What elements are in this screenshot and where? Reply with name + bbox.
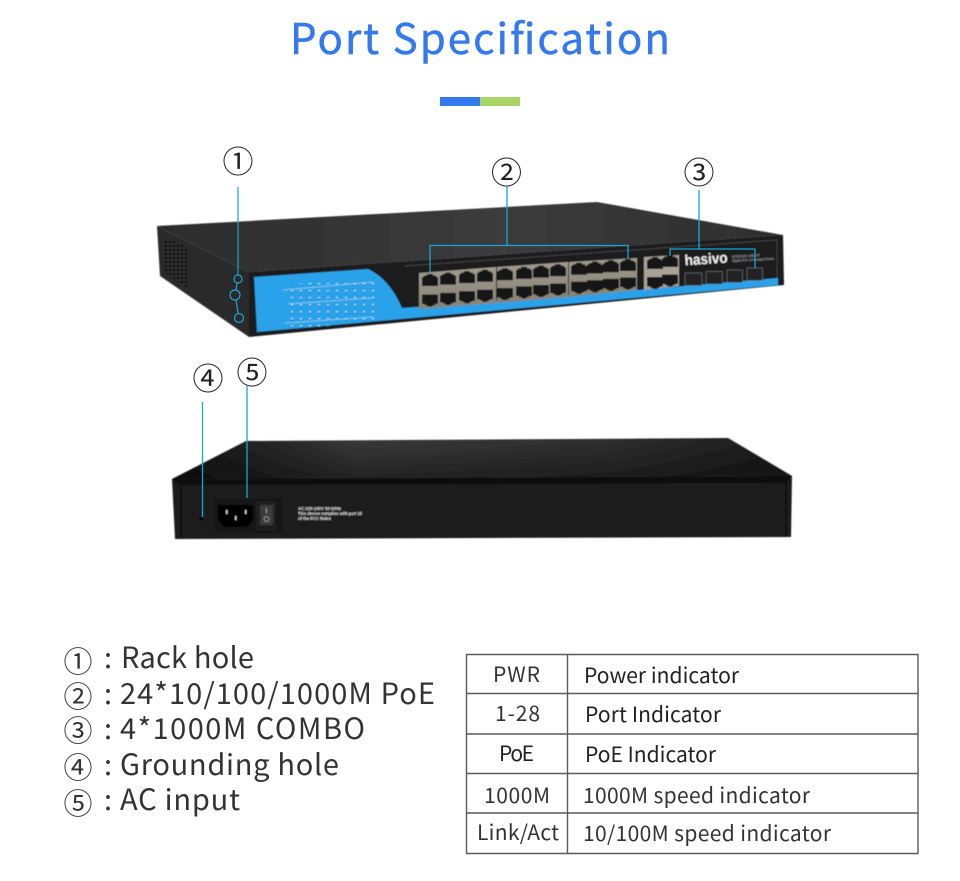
legend: rack hole: Rack hole xyxy=(121,635,254,677)
switch side with vents xyxy=(157,226,249,337)
model text: GS5028P-24G-4T xyxy=(732,253,761,259)
rating label xyxy=(298,506,362,521)
rating label: of the FCC Rules xyxy=(298,516,331,521)
RJ45 port block xyxy=(419,258,637,309)
rear top cover xyxy=(172,438,792,479)
legend: grounding hole: ④ xyxy=(63,745,93,787)
callout 3: combo ports: ③ xyxy=(684,148,714,193)
row: 1-28 xyxy=(495,698,722,729)
power socket panel xyxy=(214,498,283,533)
row: Link/Act: 10/100M speed indicator xyxy=(583,818,832,848)
row: PoE xyxy=(499,738,717,769)
row: Link/Act: Link/Act xyxy=(477,817,559,847)
title: Port Specification xyxy=(290,6,670,67)
rating label: AC:100-240V 50-60Hz xyxy=(298,506,342,511)
callout 1: rack hole: ① xyxy=(222,137,254,182)
callout 2: PoE ports xyxy=(430,148,628,273)
callout 3: combo ports xyxy=(670,148,755,268)
table grid xyxy=(466,654,918,854)
legend: combo ports: : xyxy=(104,706,112,748)
callout 5: AC input: ⑤ xyxy=(236,348,268,393)
row: 1-28: Port Indicator xyxy=(585,699,722,729)
row: 1000M: 1000M speed indicator xyxy=(583,780,811,810)
switch front face xyxy=(249,235,784,337)
legend: AC input: : xyxy=(104,777,112,819)
front view of switch xyxy=(157,202,784,337)
legend list xyxy=(63,635,435,823)
grounding screw xyxy=(198,516,204,522)
legend: grounding hole: : xyxy=(104,742,112,784)
row: PoE: PoE Indicator xyxy=(585,739,717,769)
legend: AC input: ⑤ xyxy=(63,781,93,823)
row: Link/Act xyxy=(477,817,832,848)
legend: PoE ports: ② xyxy=(63,674,93,716)
legend: rack hole: : xyxy=(104,635,112,677)
row: 1000M xyxy=(484,780,811,810)
row: PWR xyxy=(493,659,740,690)
row: PoE: PoE xyxy=(499,738,534,768)
row: PWR: Power indicator xyxy=(584,660,740,690)
title accent bar xyxy=(440,97,520,106)
legend: combo ports: ③ xyxy=(63,708,93,750)
row: 1-28: 1-28 xyxy=(495,698,540,728)
rear face xyxy=(172,476,792,539)
legend: AC input xyxy=(63,777,240,823)
row: PWR: PWR xyxy=(493,659,540,689)
model text xyxy=(732,253,774,263)
blue front panel xyxy=(254,269,778,332)
hasivo logo: hasivo xyxy=(684,250,728,269)
legend: AC input: AC input xyxy=(120,777,240,819)
SFP slots xyxy=(685,268,762,286)
legend: PoE ports: 24*10/100/1000M PoE xyxy=(120,671,435,713)
callout 4: grounding hole: ④ xyxy=(192,354,224,399)
legend: rack hole xyxy=(63,635,254,681)
legend: grounding hole: Grounding hole xyxy=(120,742,339,784)
row: 1000M: 1000M xyxy=(484,780,550,810)
legend: PoE ports: : xyxy=(104,671,112,713)
legend: combo ports: 4*1000M COMBO xyxy=(120,706,365,748)
model text: Gigabit PoE Unmanaged Switch xyxy=(732,257,774,263)
rating label: This device complies with part 15 xyxy=(298,511,362,516)
legend: rack hole: ① xyxy=(63,639,93,681)
combo RJ45 ports xyxy=(644,255,679,290)
callout 1: rack hole xyxy=(222,137,254,322)
indicator table xyxy=(466,654,918,854)
switch top cover xyxy=(157,202,783,272)
callout 2: PoE ports: ② xyxy=(491,148,522,193)
rear view of switch xyxy=(172,438,792,539)
